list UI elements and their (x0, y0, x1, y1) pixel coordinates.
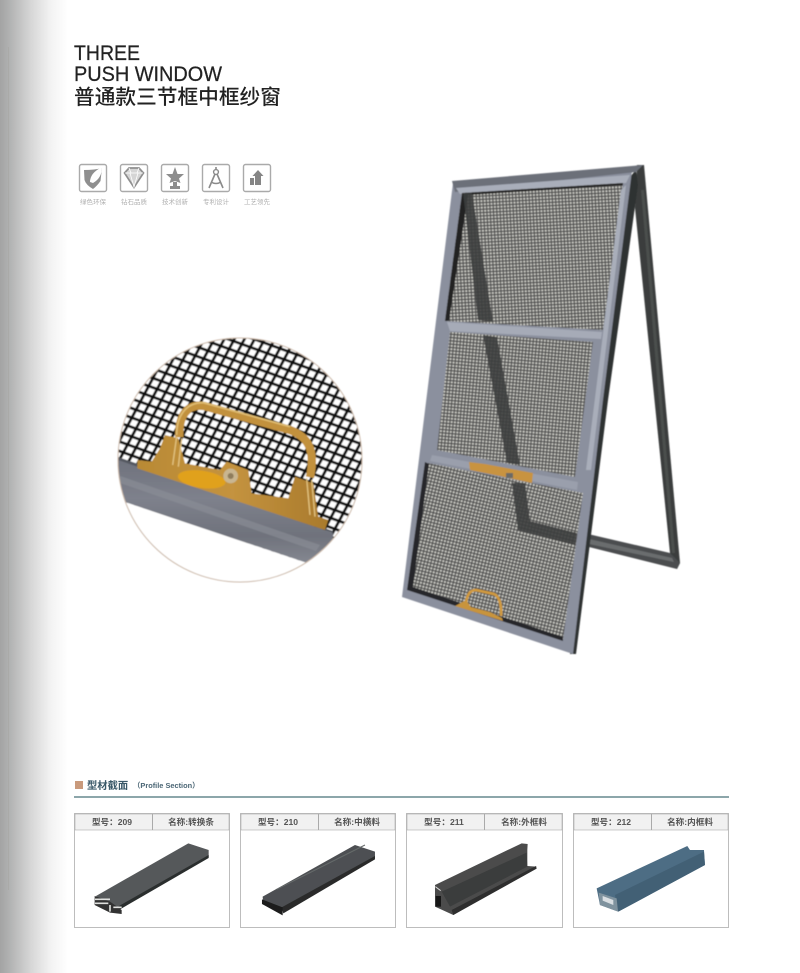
profile card 210: 型号：210 (258, 816, 298, 827)
profile card 209 (74, 814, 230, 928)
mesh close-up (118, 338, 362, 582)
icon: upward arrow: 工艺领先 (244, 197, 270, 206)
title (74, 42, 281, 109)
back frame leg (635, 165, 680, 569)
upper panel edge shadow (445, 183, 623, 321)
section divider (74, 796, 729, 798)
title: THREE (74, 42, 140, 65)
profile card 211: 型号：211 (424, 816, 464, 827)
profile card 211 (406, 814, 562, 928)
icon: upward arrow (244, 164, 270, 206)
feature icon row (80, 164, 270, 206)
profile image 210 (262, 845, 375, 915)
lower panel edge shadow (407, 462, 563, 641)
upper mesh panel (445, 183, 623, 330)
middle mesh panel (437, 332, 593, 477)
circular detail: handle close-up (110, 338, 362, 600)
middle rail highlight (447, 322, 602, 339)
sash frame (402, 171, 632, 654)
icon: green shield: 绿色环保 (80, 197, 106, 206)
top bar (452, 165, 643, 192)
right frame highlight (586, 185, 626, 470)
detail clip group (118, 456, 334, 582)
frame shadow through mesh (463, 193, 577, 545)
window product (402, 165, 680, 654)
profile card 212 (574, 814, 728, 928)
icon: green shield (80, 164, 106, 206)
section heading: profile section: （Profile Section） (133, 781, 200, 790)
profile card 212: 名称:内框料 (667, 816, 713, 827)
left page shadow (0, 0, 68, 973)
section heading: profile section (75, 779, 200, 792)
profile card 210: 名称:中横料 (334, 816, 380, 827)
icon: compass (202, 164, 230, 206)
profile image 212 (597, 846, 705, 912)
sash side strip (570, 170, 638, 654)
profile card 212: 型号：212 (591, 816, 631, 827)
icon: star trophy (162, 164, 188, 206)
title: 普通款三节框中框纱窗 (74, 86, 281, 109)
icon: star trophy: 技术创新 (162, 197, 188, 206)
circle outline (118, 338, 362, 582)
window handle (455, 590, 503, 621)
section heading: profile section: 型材截面 (87, 779, 128, 792)
back frame bottom bar (588, 534, 680, 569)
gold handle (137, 403, 328, 530)
profile image 211 (435, 843, 537, 915)
profile card 209: 型号：209 (92, 816, 132, 827)
profile image 209 (95, 843, 209, 914)
top frame highlight (456, 175, 630, 194)
lower mesh panel (410, 463, 583, 640)
rail latch (469, 462, 533, 483)
profile card 209: 名称:转换条 (168, 816, 214, 827)
icon: diamond (120, 164, 148, 206)
lower rail highlight (430, 455, 578, 490)
icon: compass: 专利设计 (203, 197, 230, 206)
title: PUSH WINDOW (74, 63, 222, 86)
profile card 211: 名称:外框料 (501, 816, 547, 827)
icon: diamond: 钻石品质 (121, 197, 148, 206)
profile card 210 (240, 814, 396, 928)
